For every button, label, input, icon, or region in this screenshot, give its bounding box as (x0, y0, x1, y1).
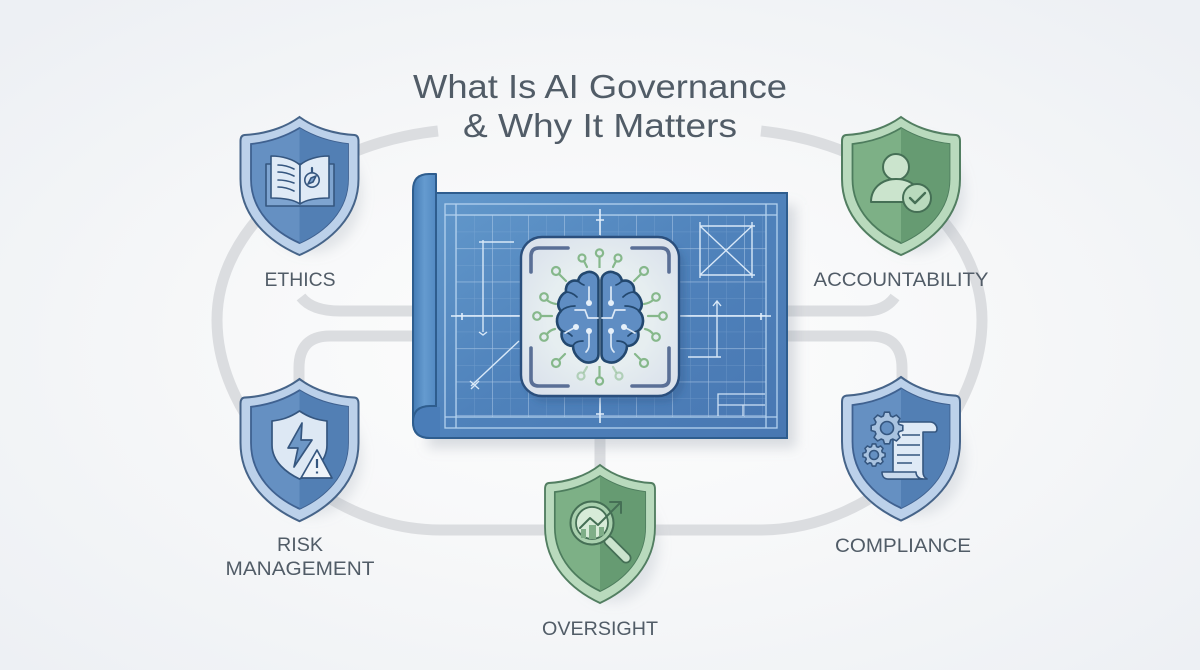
central blueprint (413, 174, 796, 448)
icon: gears and scroll (863, 412, 937, 479)
title (413, 69, 787, 145)
shield: risk management (240, 379, 362, 521)
blueprint shadow (428, 205, 796, 448)
brain icon (557, 272, 643, 363)
title: What Is AI Governance (413, 69, 787, 106)
label: ethics: ETHICS (264, 270, 336, 291)
card shadow (525, 243, 685, 403)
icon: person with check (871, 154, 931, 212)
label: risk management: MANAGEMENT (226, 559, 375, 580)
title: & Why It Matters (463, 108, 737, 145)
shield: compliance (842, 377, 965, 521)
shield: accountability (842, 117, 965, 255)
card panel (521, 237, 679, 396)
corner brackets (531, 248, 669, 386)
label: compliance: COMPLIANCE (835, 536, 971, 557)
label: risk management (226, 535, 375, 580)
blueprint roll (413, 174, 440, 438)
icon: risk shield with bolt and warning (272, 411, 332, 479)
circuit spokes (533, 249, 667, 385)
shield: ethics (240, 117, 362, 255)
blueprint grid (445, 204, 777, 428)
icon: book and compass (266, 156, 334, 206)
icon: magnifier with chart (570, 502, 626, 558)
label: accountability: ACCOUNTABILITY (814, 270, 989, 291)
shield: oversight (545, 465, 659, 603)
connector lines (217, 131, 982, 530)
label: oversight: OVERSIGHT (542, 619, 658, 640)
blueprint sheet (430, 193, 787, 438)
brain card (521, 237, 685, 403)
label: risk management: RISK (277, 535, 323, 556)
